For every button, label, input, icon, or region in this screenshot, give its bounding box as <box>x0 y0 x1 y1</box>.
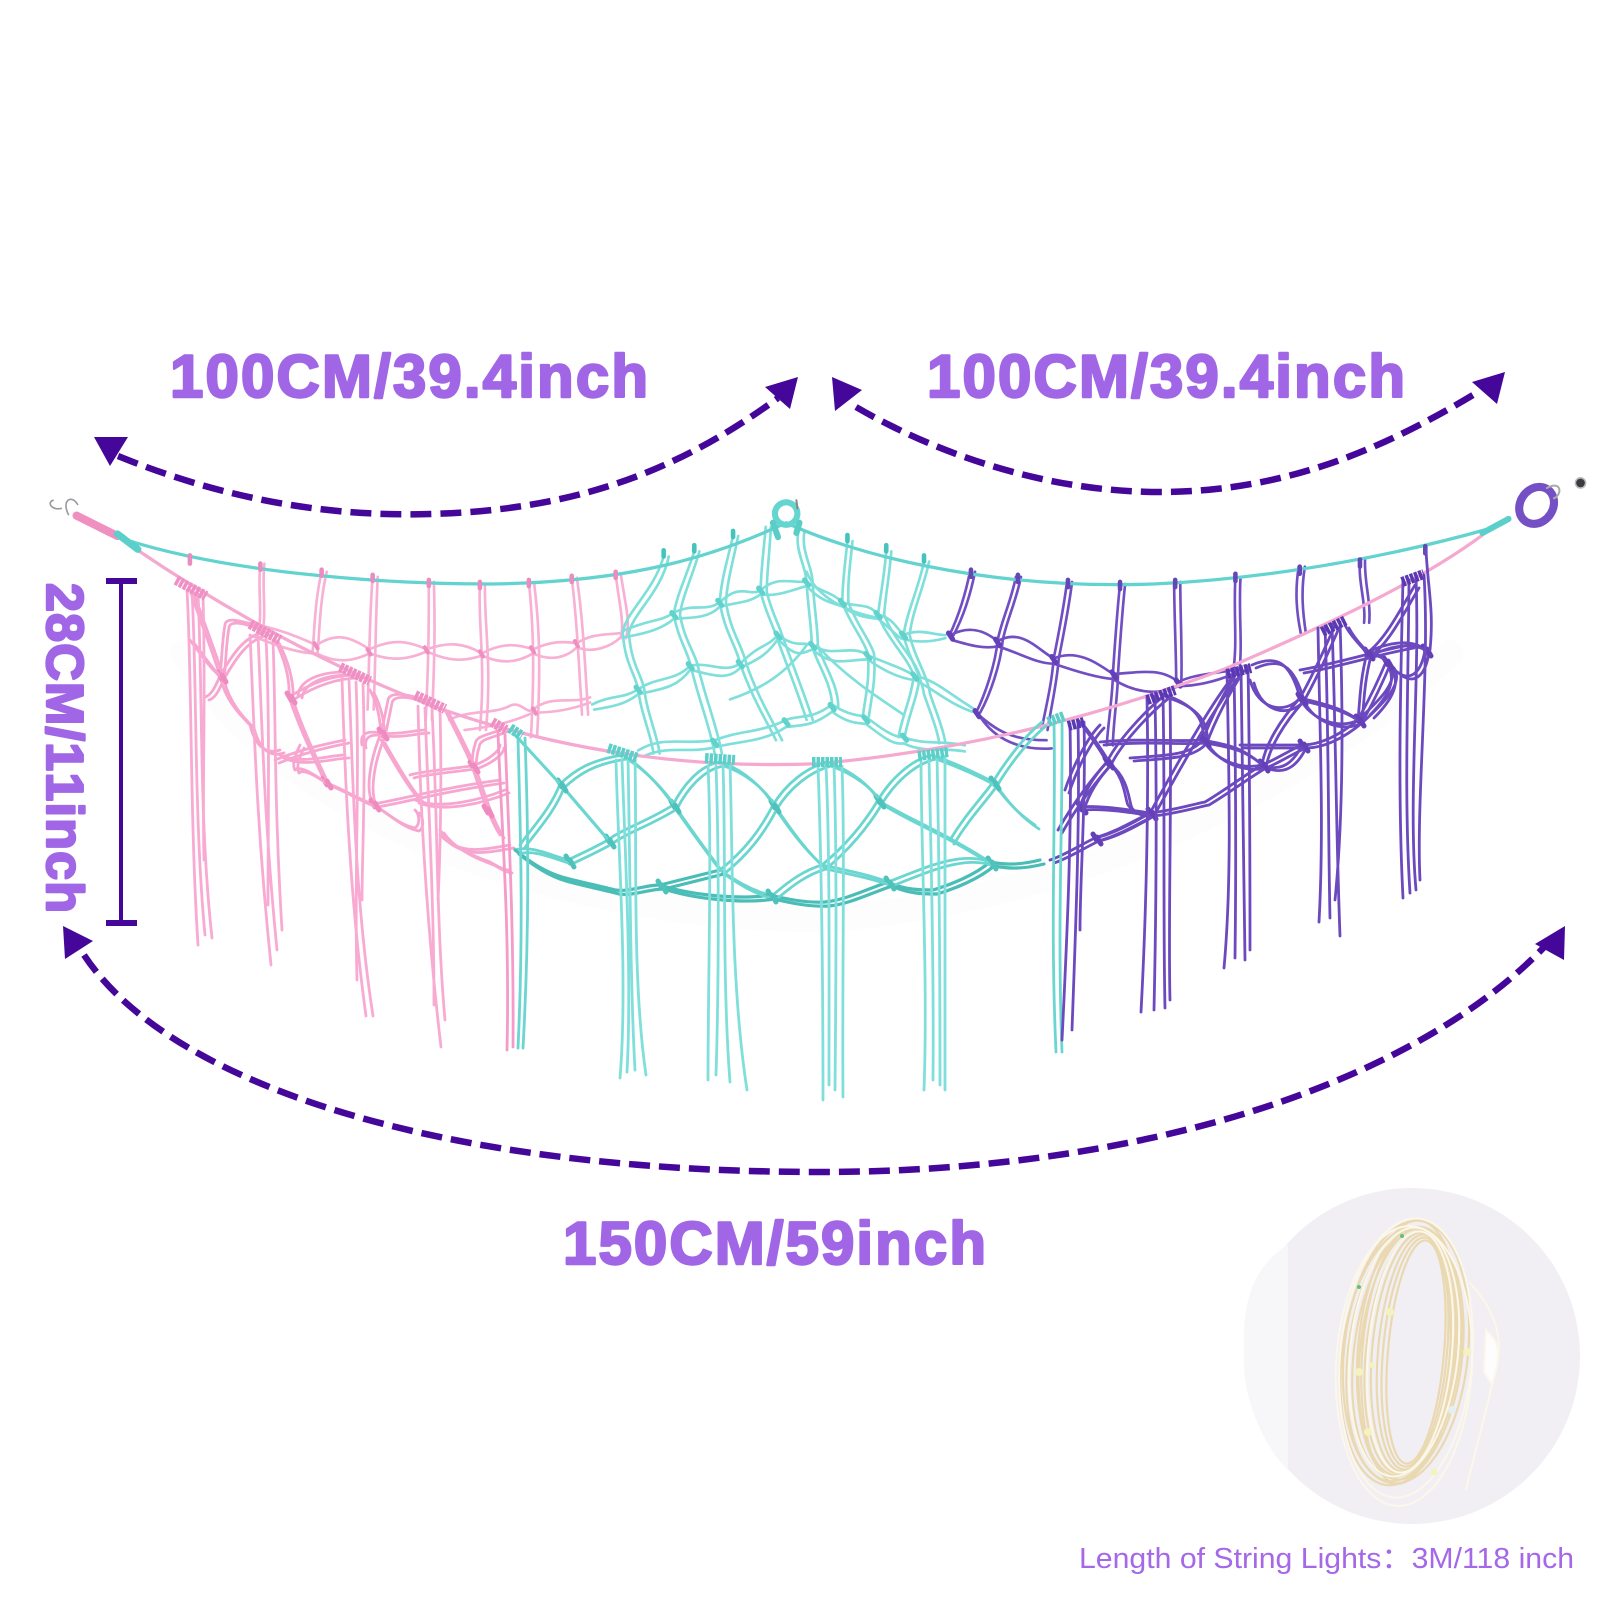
front net: purple <box>1050 585 1431 863</box>
label: height: 28CM/11inch <box>35 583 93 913</box>
back net: purple <box>949 560 1370 749</box>
wire coil <box>1327 1214 1481 1492</box>
photo backdrop <box>1244 1188 1580 1524</box>
front net: teal <box>515 722 1046 906</box>
label: right top width: 100CM/39.4inch <box>927 343 1405 410</box>
front rope <box>135 535 1482 765</box>
back net: teal <box>592 527 975 756</box>
center hanger <box>773 500 799 537</box>
label: bottom width: 150CM/59inch <box>563 1210 986 1277</box>
string lights photo <box>1244 1188 1580 1524</box>
macrame net <box>50 478 1586 1100</box>
hangers <box>50 478 1586 549</box>
back net: pink <box>235 564 628 737</box>
caption: string lights length: Length of String Lights：3M/118 inch <box>1079 1543 1574 1575</box>
front net: pink <box>190 590 514 873</box>
outer pale wires <box>1328 1213 1499 1509</box>
tassels: purple <box>1062 550 1431 1040</box>
soft shadow <box>184 653 1450 919</box>
tassels: teal <box>510 716 1064 1100</box>
top rope <box>114 523 1489 585</box>
bracket: height <box>106 578 137 926</box>
label: left top width: 100CM/39.4inch <box>170 343 648 410</box>
left hanger <box>50 499 138 549</box>
arrow: right top span <box>832 372 1505 492</box>
arrow: bottom span <box>63 926 1565 1172</box>
right hanger <box>1482 478 1586 533</box>
wall bracket <box>1244 1244 1288 1470</box>
top knots <box>190 531 1425 589</box>
back net <box>114 523 1489 919</box>
LED beads <box>1355 1234 1471 1476</box>
arrow: left top span <box>94 377 798 514</box>
tassels: pink <box>176 580 513 1050</box>
